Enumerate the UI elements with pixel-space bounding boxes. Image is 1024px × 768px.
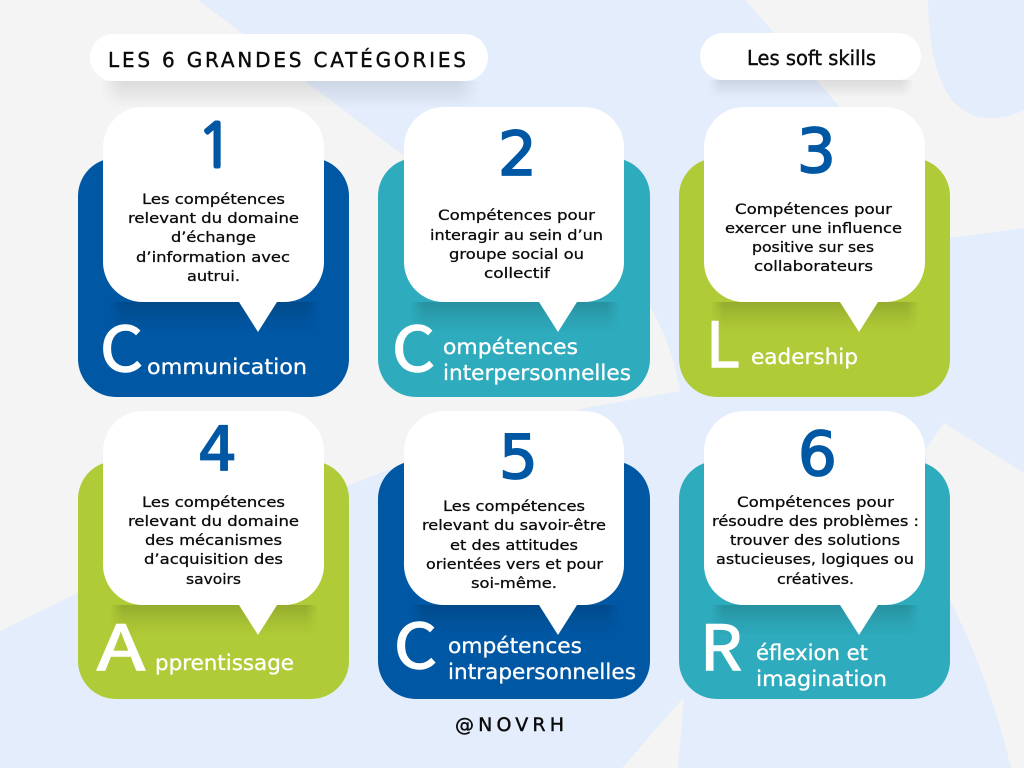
panel: card 5 compétences intrapersonnelles: et des attitudes — [450, 538, 578, 554]
panel: card 5 compétences intrapersonnelles: C — [394, 596, 437, 686]
panel: card 4 apprentissage: Les compétences — [142, 495, 285, 511]
title pill: LES 6 GRANDES CATÉGORIES — [108, 48, 466, 72]
panel: card 6 réflexion et imagination: éflexion et — [756, 641, 868, 665]
panel: card 3 leadership: collaborateurs — [754, 259, 873, 275]
panel: card 2 compétences interpersonnelles: ompétences — [443, 335, 578, 359]
panel: card 1 communication: d’information avec — [136, 250, 290, 266]
panel: card 5 compétences intrapersonnelles: soi-même. — [471, 576, 557, 592]
panel: card 3 leadership: positive sur ses — [752, 240, 874, 256]
panel: card 4 apprentissage — [78, 411, 349, 699]
panel: card 1 communication: Les compétences — [142, 192, 285, 208]
panel: card 2 compétences interpersonnelles: interpersonnelles — [443, 361, 631, 385]
panel: card 5 compétences intrapersonnelles — [378, 411, 650, 699]
subtitle pill: Les soft skills — [747, 46, 876, 70]
panel: card 5 compétences intrapersonnelles: 5 — [499, 422, 538, 493]
panel: card 3 leadership: 3 — [797, 116, 836, 187]
panel: card 1 communication: autrui. — [187, 269, 240, 285]
panel: card 6 réflexion et imagination — [679, 411, 950, 699]
panel: card 3 leadership: exercer une influence — [725, 221, 902, 237]
title pill — [90, 34, 488, 99]
panel: card 4 apprentissage: A — [97, 598, 145, 688]
panel: card 4 apprentissage: 4 — [198, 414, 237, 485]
panel: card 4 apprentissage: d’acquisition des — [144, 552, 283, 568]
panel: card 1 communication — [78, 107, 349, 397]
panel: card 4 apprentissage: relevant du domaine — [128, 514, 299, 530]
panel: card 4 apprentissage: savoirs — [186, 572, 241, 588]
panel: card 6 réflexion et imagination: 6 — [798, 419, 837, 490]
panel: card 6 réflexion et imagination: résoudre des problèmes : — [712, 514, 919, 530]
panel: card 5 compétences intrapersonnelles: ompétences — [448, 634, 582, 658]
panel: card 3 leadership: L — [706, 295, 740, 385]
panel: card 5 compétences intrapersonnelles: Les compétences — [443, 499, 585, 515]
subtitle pill — [700, 33, 921, 98]
panel: card 6 réflexion et imagination: trouver des solutions — [730, 533, 900, 549]
panel: card 2 compétences interpersonnelles: Compétences pour — [438, 208, 595, 224]
panel: card 2 compétences interpersonnelles — [378, 107, 650, 397]
panel: card 1 communication: d’échange — [171, 230, 256, 246]
panel: card 6 réflexion et imagination: imagination — [756, 667, 887, 691]
panel: card 5 compétences intrapersonnelles: intrapersonnelles — [448, 660, 636, 684]
panel: card 1 communication: 1 — [197, 116, 233, 176]
panel: card 6 réflexion et imagination: Compétences pour — [737, 495, 894, 511]
panel: card 1 communication: C — [100, 299, 143, 389]
panel: card 1 communication: ommunication — [147, 355, 307, 379]
panel: card 4 apprentissage: des mécanismes — [145, 533, 282, 549]
panel: card 2 compétences interpersonnelles: 2 — [498, 119, 537, 190]
panel: card 6 réflexion et imagination: créatives. — [777, 572, 854, 588]
panel: card 3 leadership: Compétences pour — [735, 202, 892, 218]
panel: card 5 compétences intrapersonnelles: relevant du savoir-être — [422, 518, 606, 534]
panel: card 5 compétences intrapersonnelles: orientées vers et pour — [426, 557, 603, 573]
panel: card 2 compétences interpersonnelles: groupe social ou — [449, 247, 584, 263]
panel: card 6 réflexion et imagination: astucieuses, logiques ou — [716, 552, 914, 568]
footer handle: @NOVRH — [455, 714, 564, 736]
panel: card 6 réflexion et imagination: R — [700, 598, 742, 688]
panel: card 4 apprentissage: pprentissage — [155, 651, 294, 675]
panel: card 2 compétences interpersonnelles: collectif — [484, 266, 551, 282]
panel: card 3 leadership: eadership — [751, 345, 858, 369]
panel: card 2 compétences interpersonnelles: C — [392, 299, 435, 389]
panel: card 3 leadership — [679, 107, 950, 397]
panel: card 2 compétences interpersonnelles: interagir au sein d’un — [430, 228, 603, 244]
panel: card 1 communication: relevant du domaine — [128, 211, 299, 227]
